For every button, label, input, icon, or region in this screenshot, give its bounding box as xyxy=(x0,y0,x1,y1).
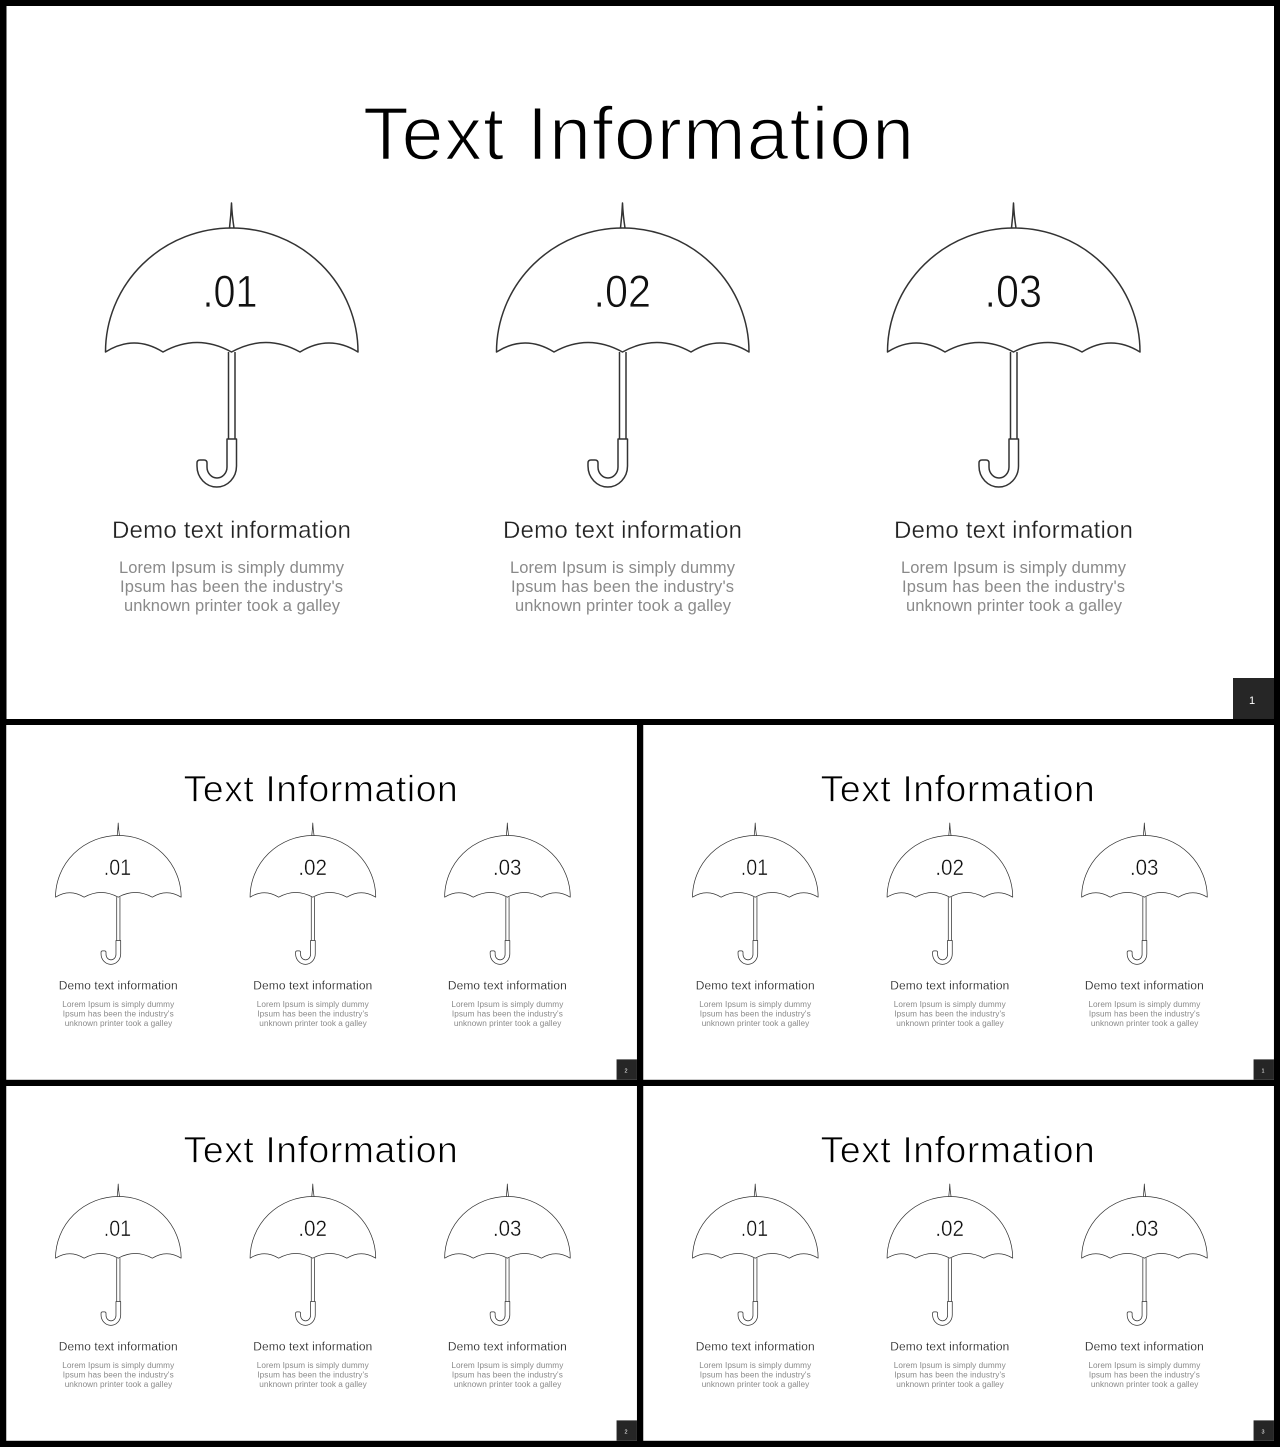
page number badge xyxy=(1254,1420,1274,1441)
number .02: .02 xyxy=(298,855,327,880)
heading: Demo text information xyxy=(59,979,178,993)
heading: Demo text information xyxy=(696,979,815,993)
page number badge: 1 xyxy=(1249,695,1255,707)
number .02: .02 xyxy=(594,266,651,317)
body text: Ipsum has been the industry's xyxy=(894,1371,1005,1380)
icon: umbrella 03 xyxy=(1082,1184,1207,1325)
body text: Ipsum has been the industry's xyxy=(894,1010,1005,1019)
body text: Lorem Ipsum is simply dummy xyxy=(699,1000,812,1009)
body text: unknown printer took a galley xyxy=(259,1019,368,1028)
number .02: .02 xyxy=(298,1216,327,1241)
column: item 02 xyxy=(496,203,749,615)
body text: Ipsum has been the industry's xyxy=(700,1010,811,1019)
panel: main slide 1 xyxy=(6,6,1274,719)
body text: unknown printer took a galley xyxy=(896,1019,1005,1028)
body text: Ipsum has been the industry's xyxy=(452,1010,563,1019)
column: item 03 xyxy=(1082,1184,1207,1389)
body text: unknown printer took a galley xyxy=(896,1380,1005,1389)
body text xyxy=(119,559,345,615)
body text: unknown printer took a galley xyxy=(1091,1019,1199,1028)
number .03: .03 xyxy=(493,855,522,880)
body text: Lorem Ipsum is simply dummy xyxy=(894,1361,1007,1370)
body text: unknown printer took a galley xyxy=(259,1380,368,1389)
panel: slide 3 xyxy=(643,725,1274,1080)
body text: Ipsum has been the industry's xyxy=(902,578,1125,596)
body text: Lorem Ipsum is simply dummy xyxy=(451,1361,564,1370)
icon: umbrella 02 xyxy=(250,1184,376,1325)
body text: Lorem Ipsum is simply dummy xyxy=(451,1000,564,1009)
icon: umbrella 03 xyxy=(1082,823,1207,964)
number .03: .03 xyxy=(1130,855,1159,880)
body text: Ipsum has been the industry's xyxy=(511,578,734,596)
heading: Demo text information xyxy=(448,1340,567,1354)
page number badge: 1 xyxy=(1261,1068,1265,1074)
page number badge: 2 xyxy=(624,1429,628,1435)
heading: Demo text information xyxy=(448,979,567,993)
number .01: .01 xyxy=(741,855,768,880)
title: Text Information xyxy=(184,1128,458,1170)
body text xyxy=(1088,1361,1201,1389)
body text xyxy=(894,1000,1007,1028)
number .03: .03 xyxy=(1130,1216,1159,1241)
number .01: .01 xyxy=(104,1216,131,1241)
number .02: .02 xyxy=(935,1216,964,1241)
body text: unknown printer took a galley xyxy=(454,1380,562,1389)
column: item 01 xyxy=(693,1184,818,1389)
icon: umbrella 01 xyxy=(56,1184,181,1325)
body text: Lorem Ipsum is simply dummy xyxy=(901,559,1127,577)
body text: unknown printer took a galley xyxy=(906,597,1123,615)
column: item 01 xyxy=(56,823,181,1028)
body text xyxy=(62,1000,175,1028)
column: item 01 xyxy=(106,203,358,615)
body text: Ipsum has been the industry's xyxy=(1089,1371,1200,1380)
heading: Demo text information xyxy=(59,1340,178,1354)
column: item 03 xyxy=(1082,823,1207,1028)
column: item 02 xyxy=(887,1184,1013,1389)
body text: Ipsum has been the industry's xyxy=(452,1371,563,1380)
body text: Ipsum has been the industry's xyxy=(257,1371,368,1380)
heading: Demo text information xyxy=(503,517,742,544)
page number badge xyxy=(617,1420,637,1441)
icon: umbrella 03 xyxy=(445,1184,570,1325)
body text: Lorem Ipsum is simply dummy xyxy=(699,1361,812,1370)
body text: unknown printer took a galley xyxy=(65,1019,173,1028)
heading: Demo text information xyxy=(1085,979,1204,993)
body text: Lorem Ipsum is simply dummy xyxy=(1088,1361,1201,1370)
column: item 01 xyxy=(56,1184,181,1389)
body text: unknown printer took a galley xyxy=(124,597,341,615)
number .03: .03 xyxy=(493,1216,522,1241)
body text xyxy=(699,1000,812,1028)
body text: Lorem Ipsum is simply dummy xyxy=(62,1000,175,1009)
heading: Demo text information xyxy=(894,517,1133,544)
number .02: .02 xyxy=(935,855,964,880)
body text: unknown printer took a galley xyxy=(454,1019,562,1028)
body text: Lorem Ipsum is simply dummy xyxy=(257,1361,370,1370)
body text xyxy=(257,1000,370,1028)
page number badge: 2 xyxy=(624,1068,628,1074)
body text: Ipsum has been the industry's xyxy=(63,1010,174,1019)
body text: Lorem Ipsum is simply dummy xyxy=(1088,1000,1201,1009)
panel: slide 4 xyxy=(6,1086,637,1441)
number .03: .03 xyxy=(984,266,1042,317)
heading: Demo text information xyxy=(696,1340,815,1354)
body text: Ipsum has been the industry's xyxy=(1089,1010,1200,1019)
body text xyxy=(451,1361,564,1389)
icon: umbrella 02 xyxy=(250,823,376,964)
column: item 03 xyxy=(445,1184,570,1389)
icon: umbrella 01 xyxy=(693,1184,818,1325)
body text xyxy=(1088,1000,1201,1028)
icon: umbrella 02 xyxy=(887,1184,1013,1325)
heading: Demo text information xyxy=(253,1340,372,1354)
icon: umbrella 01 xyxy=(106,203,358,487)
heading: Demo text information xyxy=(253,979,372,993)
panel: slide 2 xyxy=(6,725,637,1080)
heading: Demo text information xyxy=(890,979,1009,993)
title: Text Information xyxy=(363,92,914,176)
icon: umbrella 03 xyxy=(888,203,1140,487)
body text xyxy=(451,1000,564,1028)
page number badge: 3 xyxy=(1261,1429,1265,1435)
title: Text Information xyxy=(821,1128,1095,1170)
page number badge xyxy=(1254,1059,1274,1080)
title: Text Information xyxy=(821,767,1095,809)
heading: Demo text information xyxy=(890,1340,1009,1354)
body text: Lorem Ipsum is simply dummy xyxy=(894,1000,1007,1009)
body text xyxy=(257,1361,370,1389)
body text: unknown printer took a galley xyxy=(515,597,732,615)
icon: umbrella 01 xyxy=(693,823,818,964)
body text: Ipsum has been the industry's xyxy=(700,1371,811,1380)
icon: umbrella 03 xyxy=(445,823,570,964)
body text xyxy=(510,559,736,615)
number .01: .01 xyxy=(202,266,258,317)
heading: Demo text information xyxy=(112,517,351,544)
body text: unknown printer took a galley xyxy=(65,1380,173,1389)
body text: Lorem Ipsum is simply dummy xyxy=(62,1361,175,1370)
body text: Ipsum has been the industry's xyxy=(257,1010,368,1019)
body text: Lorem Ipsum is simply dummy xyxy=(119,559,345,577)
column: item 03 xyxy=(888,203,1140,615)
icon: umbrella 02 xyxy=(887,823,1013,964)
body text xyxy=(699,1361,812,1389)
column: item 02 xyxy=(887,823,1013,1028)
body text: unknown printer took a galley xyxy=(702,1019,810,1028)
body text: Lorem Ipsum is simply dummy xyxy=(510,559,736,577)
body text: Ipsum has been the industry's xyxy=(120,578,343,596)
icon: umbrella 01 xyxy=(56,823,181,964)
heading: Demo text information xyxy=(1085,1340,1204,1354)
body text: unknown printer took a galley xyxy=(702,1380,810,1389)
column: item 03 xyxy=(445,823,570,1028)
body text: unknown printer took a galley xyxy=(1091,1380,1199,1389)
body text: Lorem Ipsum is simply dummy xyxy=(257,1000,370,1009)
panel: slide 5 xyxy=(643,1086,1274,1441)
page number badge xyxy=(617,1059,637,1080)
body text xyxy=(62,1361,175,1389)
column: item 02 xyxy=(250,1184,376,1389)
number .01: .01 xyxy=(104,855,131,880)
icon: umbrella 02 xyxy=(496,203,749,487)
number .01: .01 xyxy=(741,1216,768,1241)
body text: Ipsum has been the industry's xyxy=(63,1371,174,1380)
page number badge xyxy=(1233,678,1274,719)
column: item 01 xyxy=(693,823,818,1028)
body text xyxy=(901,559,1127,615)
column: item 02 xyxy=(250,823,376,1028)
body text xyxy=(894,1361,1007,1389)
title: Text Information xyxy=(184,767,458,809)
